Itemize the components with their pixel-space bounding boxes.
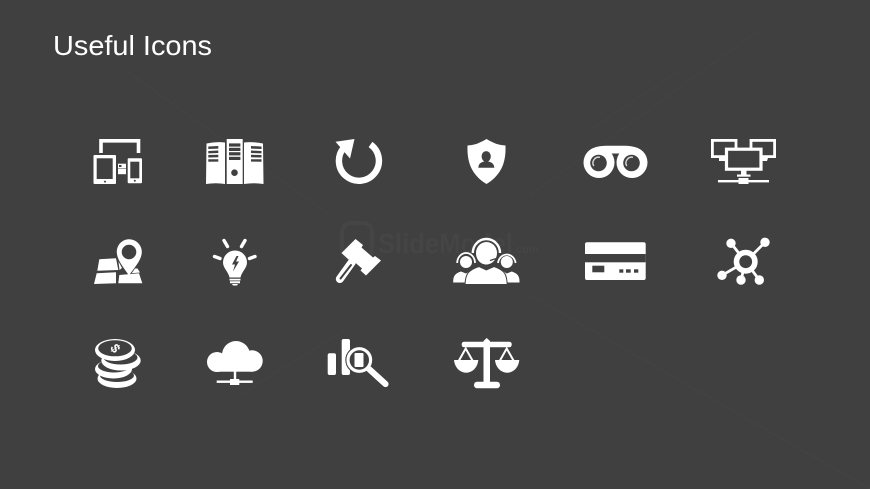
watermark: SlideModel [378, 228, 513, 259]
icon: shield with person [467, 139, 506, 184]
icon: light bulb [214, 240, 255, 286]
icon: network monitors [712, 140, 775, 184]
icon: credit card [585, 242, 646, 280]
icon: cloud network [207, 341, 263, 385]
watermark [342, 223, 539, 259]
icon grid [94, 139, 775, 388]
icon: balance scales [454, 338, 519, 388]
icon: chart with magnifier [328, 339, 386, 384]
icon: hub and spokes [717, 238, 770, 285]
icon: binoculars [584, 146, 648, 178]
icon: support team with headsets [453, 239, 520, 284]
icon: devices [94, 141, 142, 184]
icon: map pin [94, 239, 142, 284]
icon: coin stack: $ [107, 341, 124, 356]
icon: coin stack [95, 339, 141, 388]
watermark: .com [513, 244, 539, 256]
title: Useful Icons [53, 30, 212, 61]
icon: gavel [340, 239, 381, 279]
icon: refresh arrow [336, 139, 379, 181]
icon: server racks [206, 139, 264, 184]
